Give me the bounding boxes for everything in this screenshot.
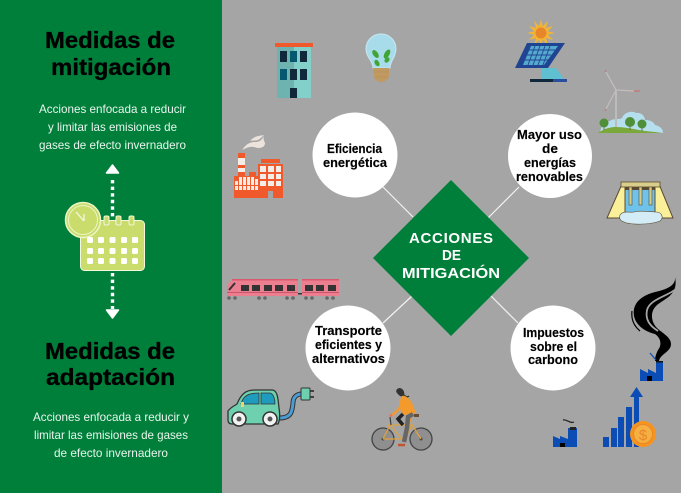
text: mitigation description: Acciones enfocada a reducir xyxy=(39,102,186,116)
icon: solar panel with sun xyxy=(515,19,567,82)
circle: Impuestos sobre el carbono: sobre el xyxy=(530,339,577,354)
arrow: dotted up xyxy=(106,165,118,217)
icon: rising bars with coin: $ xyxy=(639,427,648,444)
icon: orange factory xyxy=(234,135,283,198)
icon: small factory xyxy=(553,420,577,447)
text: adaptation description xyxy=(33,410,189,460)
circle: Mayor uso de energías renovables: de xyxy=(542,141,558,156)
icon: cyclist xyxy=(372,388,432,450)
panel: left green sidebar xyxy=(0,0,222,493)
circle: Eficiencia energética: energética xyxy=(323,155,388,170)
heading: Medidas de adaptación: Medidas de xyxy=(45,338,175,364)
icon: rising bars with coin xyxy=(603,387,656,447)
heading: Medidas de adaptación xyxy=(45,338,175,390)
connector lines xyxy=(383,187,519,323)
circle: Impuestos sobre el carbono: Impuestos xyxy=(523,325,584,340)
circle: Eficiencia energética: Eficiencia xyxy=(327,141,383,156)
circle: Mayor uso de energías renovables: renovables xyxy=(516,169,583,184)
icon: black smoke and factory xyxy=(632,277,676,381)
text: mitigation description xyxy=(39,102,186,152)
circle: Impuestos sobre el carbono: carbono xyxy=(528,352,578,367)
text: adaptation description: Acciones enfocada a reducir y xyxy=(33,410,189,424)
icon: wind turbine landscape xyxy=(598,70,663,133)
heading: Medidas de mitigación: Medidas de xyxy=(45,27,175,53)
circle: Transporte eficientes y alternativos xyxy=(306,306,390,390)
text: adaptation description: de efecto invernadero xyxy=(54,446,168,460)
arrow: dotted down xyxy=(106,273,118,318)
circle: Transporte eficientes y alternativos: alternativos xyxy=(312,351,385,366)
circle: Impuestos sobre el carbono xyxy=(510,306,596,390)
central diamond: Acciones de mitigación xyxy=(373,180,529,336)
central diamond: Acciones de mitigación: DE xyxy=(442,247,461,264)
icon: hydroelectric dam xyxy=(607,182,673,224)
icon: plant light bulb xyxy=(366,34,396,82)
heading: Medidas de adaptación: adaptación xyxy=(46,364,175,390)
icon: calendar and clock xyxy=(66,202,144,270)
icon: train xyxy=(227,279,339,300)
text: adaptation description: limitar las emisiones de gases xyxy=(34,428,188,442)
circle: Transporte eficientes y alternativos: Transporte xyxy=(315,323,382,338)
text: mitigation description: y limitar las emisiones de xyxy=(48,120,177,134)
heading: Medidas de mitigación: mitigación xyxy=(51,54,171,80)
circle: Mayor uso de energías renovables: Mayor uso xyxy=(517,127,582,142)
icon: building xyxy=(275,43,313,98)
central diamond: Acciones de mitigación: ACCIONES xyxy=(409,230,493,247)
circle: Mayor uso de energías renovables: energías xyxy=(524,155,576,170)
central diamond: Acciones de mitigación: MITIGACIÓN xyxy=(402,264,500,282)
circle: Eficiencia energética xyxy=(312,112,398,198)
circle: Transporte eficientes y alternativos: eficientes y xyxy=(315,337,383,352)
text: mitigation description: gases de efecto invernadero xyxy=(39,138,186,152)
heading: Medidas de mitigación xyxy=(45,27,175,80)
icon: electric car xyxy=(228,388,314,426)
circle: Mayor uso de energías renovables xyxy=(508,114,592,198)
